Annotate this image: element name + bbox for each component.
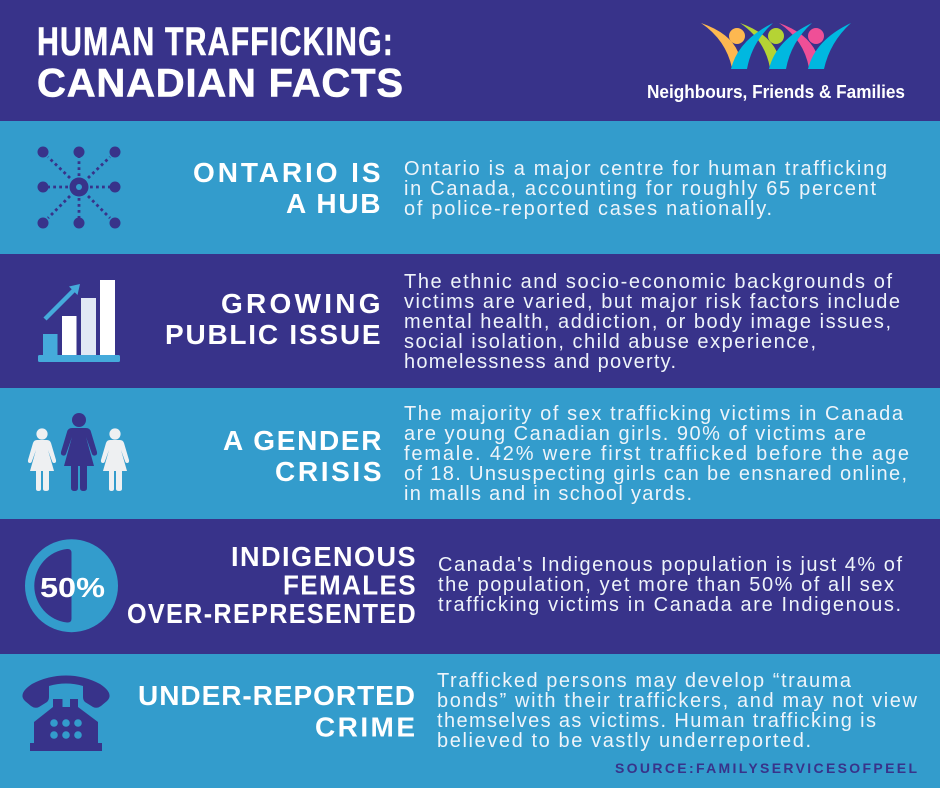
text: Under-reported crime: Trafficked persons may develop “trauma [437, 670, 852, 692]
heading: A gender crisis: CRISIS [275, 456, 382, 487]
text: Indigenous females over-represented [438, 554, 902, 616]
text: Growing public issue: victims are varied, but major risk factors include [404, 291, 900, 313]
heading: Indigenous females over-represented: INDIGENOUS [231, 541, 417, 572]
heading: Under-reported crime: CRIME [315, 712, 415, 742]
icon: telephone [22, 676, 110, 751]
title: CANADIAN FACTS [37, 62, 403, 106]
text: Ontario is a hub: of police-reported cases nationally. [404, 198, 772, 220]
icon: network hub [38, 146, 120, 228]
heading: Indigenous females over-represented: FEMALES [283, 570, 417, 600]
panel: Growing public issue [0, 254, 940, 388]
text: A gender crisis: The majority of sex trafficking victims in Canada [404, 403, 904, 425]
icon: 50% pie: 50% [40, 572, 105, 603]
text: Growing public issue: social isolation, child abuse experience, [404, 331, 816, 353]
text: Indigenous females over-represented: trafficking victims in Canada are Indigenous. [438, 594, 901, 616]
icon: rising bar chart [38, 280, 120, 362]
text: Indigenous females over-represented: Canada's Indigenous population is just 4% of [438, 554, 902, 576]
panel: Under-reported crime [0, 654, 940, 788]
heading: Under-reported crime: UNDER-REPORTED [138, 680, 415, 711]
panel: A gender crisis [0, 388, 940, 519]
logo: Neighbours, Friends & Families [647, 23, 905, 102]
heading: A gender crisis: A GENDER [223, 425, 382, 456]
heading: Growing public issue: GROWING [221, 288, 380, 319]
text: Ontario is a hub [404, 158, 887, 220]
logo: Neighbours, Friends & Families: Neighbours, Friends & Families [647, 82, 905, 102]
panel: header [0, 0, 940, 121]
text: A gender crisis: female. 42% were first trafficked before the age [404, 443, 909, 465]
heading: Ontario is a hub [193, 157, 380, 219]
heading: Under-reported crime [138, 680, 415, 742]
text: A gender crisis: in malls and in school yards. [404, 483, 692, 505]
text: Ontario is a hub: Ontario is a major centre for human trafficking [404, 158, 887, 180]
panel: Indigenous females over-represented [0, 519, 940, 654]
heading: Indigenous females over-represented: OVER-REPRESENTED [127, 598, 417, 629]
title: HUMAN TRAFFICKING: [37, 20, 394, 64]
text: Under-reported crime [437, 670, 918, 752]
heading: Indigenous females over-represented [127, 541, 417, 629]
source line: SOURCE:FAMILYSERVICESOFPEEL [615, 760, 917, 776]
text: Growing public issue: The ethnic and socio-economic backgrounds of [404, 271, 892, 293]
heading: Ontario is a hub: ONTARIO IS [193, 157, 380, 188]
heading: Growing public issue: PUBLIC ISSUE [165, 319, 380, 350]
text: Growing public issue: homelessness and poverty. [404, 351, 676, 373]
text: A gender crisis: are young Canadian girls. 90% of victims are [404, 423, 866, 445]
text: Growing public issue: mental health, addiction, or body image issues, [404, 311, 891, 333]
heading: A gender crisis [223, 425, 382, 487]
heading: Growing public issue [165, 288, 380, 350]
text: Indigenous females over-represented: the population, yet more than 50% of all sex [438, 574, 894, 596]
text: A gender crisis [404, 403, 909, 505]
icon: 50% pie [25, 539, 118, 632]
text: Under-reported crime: themselves as victims. Human trafficking is [437, 710, 876, 732]
text: Ontario is a hub: in Canada, accounting for roughly 65 percent [404, 178, 876, 200]
text: Under-reported crime: bonds” with their traffickers, and may not view [437, 690, 918, 712]
title [37, 20, 403, 106]
text: Under-reported crime: believed to be vastly underreported. [437, 730, 811, 752]
text: A gender crisis: of 18. Unsuspecting girls can be ensnared online, [404, 463, 907, 485]
icon: three women [28, 413, 129, 491]
heading: Ontario is a hub: A HUB [286, 188, 380, 219]
text: Growing public issue [404, 271, 900, 373]
panel: Ontario is a hub [0, 121, 940, 254]
